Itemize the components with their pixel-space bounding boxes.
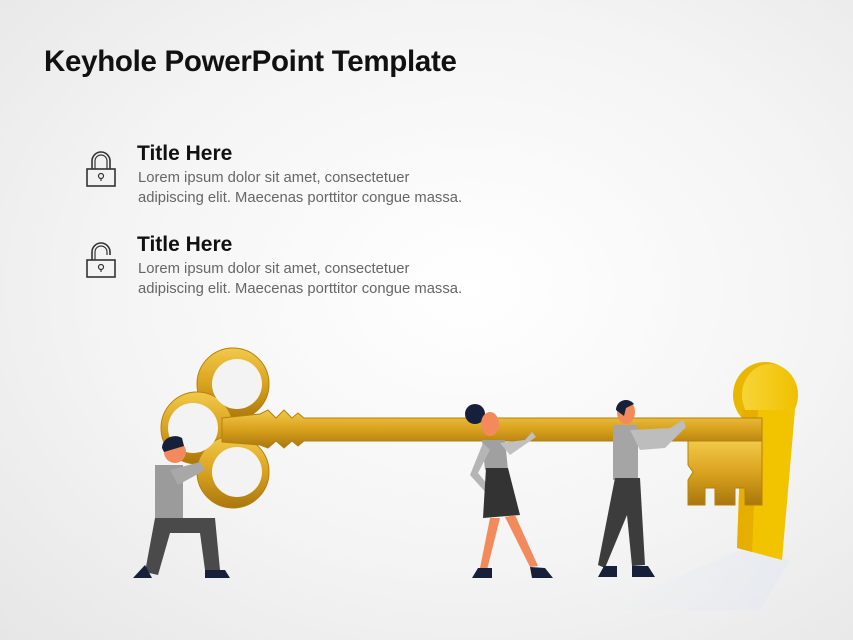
text 2: adipiscing elit. Maecenas porttitor congue massa. — [138, 281, 462, 297]
heading 1: Title Here — [137, 142, 232, 165]
item 2 — [86, 233, 462, 297]
text 2 — [138, 261, 462, 297]
title: Keyhole PowerPoint Template — [44, 45, 457, 78]
text 1: Lorem ipsum dolor sit amet, consectetuer — [138, 170, 409, 186]
text 2: Lorem ipsum dolor sit amet, consectetuer — [138, 261, 409, 277]
key — [161, 348, 762, 508]
light beam — [600, 550, 790, 610]
icon: closed lock — [86, 151, 116, 187]
item 1 — [86, 142, 462, 206]
text 1 — [138, 170, 462, 206]
person: kneeling man — [133, 436, 230, 578]
text 1: adipiscing elit. Maecenas porttitor congue massa. — [138, 190, 462, 206]
icon: open lock — [86, 242, 116, 278]
person: man standing — [598, 400, 686, 577]
keyhole — [733, 362, 798, 560]
person: woman — [465, 404, 553, 578]
heading 2: Title Here — [137, 233, 232, 256]
